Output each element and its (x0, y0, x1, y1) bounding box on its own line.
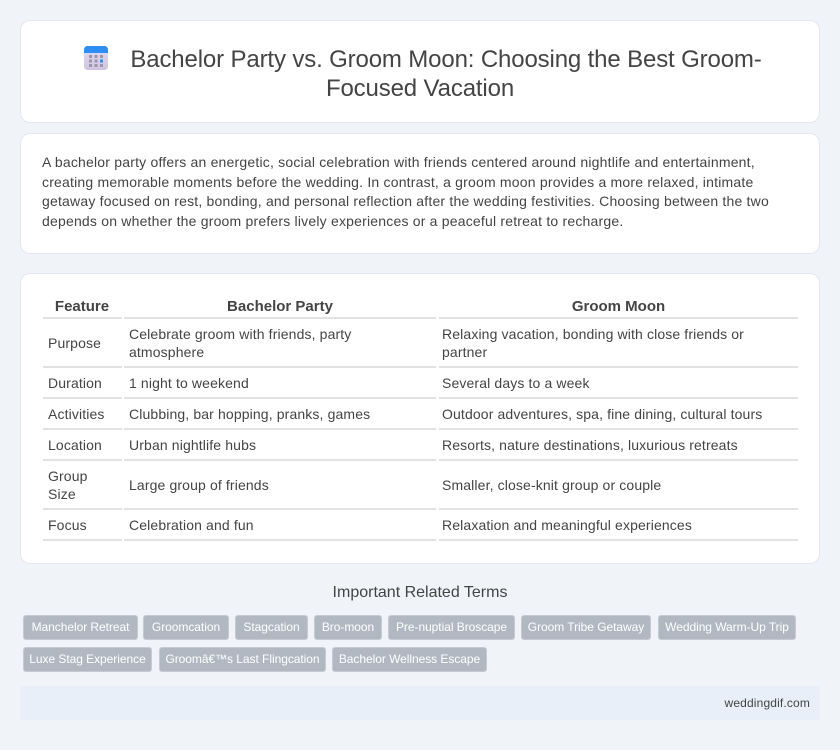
icon: calendar (84, 46, 108, 70)
panel: header (20, 20, 820, 123)
row: purpose: partner (442, 344, 487, 360)
related terms tags: Luxe Stag Experience (29, 652, 146, 666)
row: location: Urban nightlife hubs (129, 437, 256, 453)
row: activities: Clubbing, bar hopping, pranks, games (129, 406, 370, 422)
summary text: creating memorable moments before the wedding. In contrast, a groom moon provides a more relaxed, intimate (42, 174, 753, 190)
row: group size (48, 468, 661, 502)
row: duration: Several days to a week (442, 375, 590, 391)
row: focus: Focus (48, 517, 87, 533)
row: group size: Large group of friends (129, 477, 269, 493)
title: Bachelor Party vs. Groom Moon: Choosing the Best Groom-Focused Vacation (130, 46, 762, 102)
related terms tags: Stagcation (243, 620, 300, 634)
row: focus: Relaxation and meaningful experiences (442, 517, 692, 533)
table header: Feature (55, 298, 109, 315)
row: group size: Group (48, 468, 88, 484)
table header: Bachelor Party (227, 298, 333, 315)
row: activities: Activities (48, 406, 105, 422)
related terms tags: Wedding Warm-Up Trip (665, 620, 789, 634)
panel: comparison table (20, 273, 820, 564)
row: group size: Size (48, 486, 76, 502)
related terms tags: Pre-nuptial Broscape (396, 620, 507, 634)
table header: Groom Moon (572, 298, 665, 315)
row: duration (48, 375, 590, 391)
row: focus: Celebration and fun (129, 517, 254, 533)
row: purpose (48, 326, 744, 360)
row: purpose: Purpose (48, 335, 101, 351)
row: location (48, 437, 738, 453)
summary text: getaway focused on rest, bonding, and personal reflection after the wedding festivities. Choosing between the two (42, 193, 769, 209)
related terms tags: Groomâ€™s Last Flingcation (165, 652, 320, 666)
summary text: A bachelor party offers an energetic, social celebration with friends centered around nightlife and entertainment, (42, 154, 755, 170)
related terms tags: Groom Tribe Getaway (528, 620, 644, 634)
panel: summary (20, 133, 820, 254)
summary text: depends on whether the groom prefers lively experiences or a peaceful retreat to recharge. (42, 213, 623, 229)
summary text (42, 154, 769, 229)
row: duration: 1 night to weekend (129, 375, 249, 391)
related terms tags: Groomcation (152, 620, 220, 634)
row: purpose: Relaxing vacation, bonding with close friends or (442, 326, 744, 342)
row: purpose: atmosphere (129, 344, 204, 360)
row: location: Location (48, 437, 102, 453)
table header (55, 298, 665, 315)
related terms tags: Manchelor Retreat (32, 620, 129, 634)
footer (20, 686, 820, 720)
row: group size: Smaller, close-knit group or couple (442, 477, 661, 493)
related terms tags: Bachelor Wellness Escape (339, 652, 480, 666)
related terms tags: Bro-moon (322, 620, 374, 634)
heading: related terms: Important Related Terms (333, 584, 507, 601)
row: duration: Duration (48, 375, 102, 391)
related terms tags (23, 615, 796, 672)
row: activities: Outdoor adventures, spa, fine dining, cultural tours (442, 406, 762, 422)
row: focus (48, 517, 692, 533)
row: activities (48, 406, 762, 422)
footer source: weddingdif.com (725, 696, 810, 710)
row: location: Resorts, nature destinations, luxurious retreats (442, 437, 738, 453)
row: purpose: Celebrate groom with friends, party (129, 326, 351, 342)
